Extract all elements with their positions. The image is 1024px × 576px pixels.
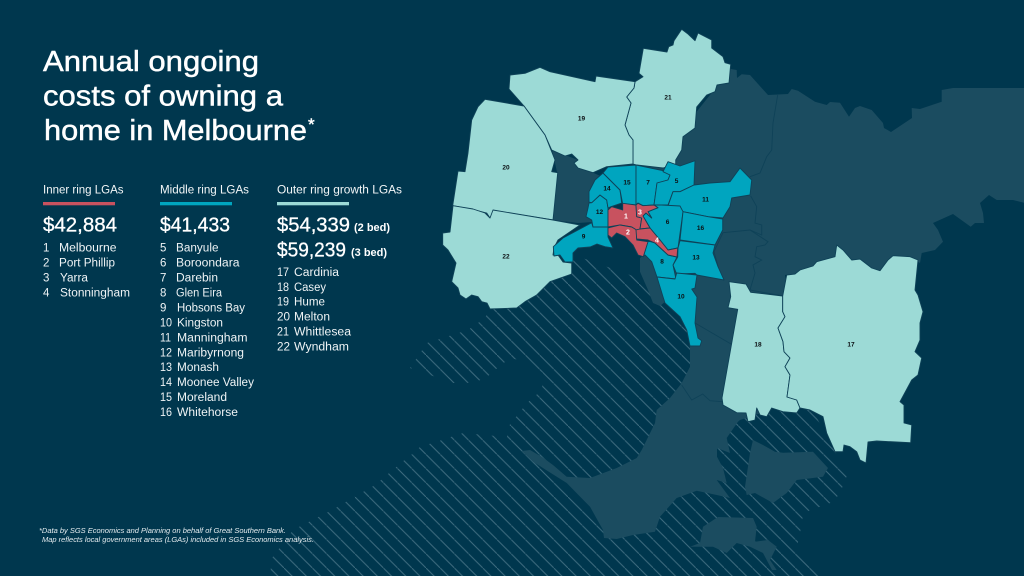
column: middle ring bbox=[160, 184, 254, 419]
column: inner ring: Inner ring LGAs bbox=[43, 184, 124, 196]
column: middle ring: Kingston bbox=[177, 317, 223, 329]
column: middle ring: Moonee Valley bbox=[177, 377, 254, 389]
map number labels: 22 bbox=[502, 254, 510, 260]
column: middle ring: 12 bbox=[160, 347, 172, 359]
column: outer ring: 21 bbox=[277, 326, 289, 338]
column: middle ring: Maribyrnong bbox=[177, 347, 244, 359]
title: costs of owning a bbox=[43, 80, 283, 112]
column: inner ring: Port Phillip bbox=[59, 258, 115, 270]
map number labels: 6 bbox=[666, 219, 670, 226]
column: middle ring: Banyule bbox=[176, 242, 218, 254]
column: inner ring: $42,884 bbox=[43, 214, 117, 237]
map number labels: 14 bbox=[603, 186, 611, 192]
map number labels: 19 bbox=[578, 116, 585, 122]
borders of surrounding LGAs bbox=[682, 95, 783, 402]
column: outer ring: Melton bbox=[294, 312, 330, 324]
column: outer ring: $54,339 bbox=[277, 214, 350, 237]
hatched water area bbox=[270, 250, 848, 576]
region 14 Moonee Valley bbox=[589, 173, 622, 208]
column: outer ring: Whittlesea bbox=[294, 326, 352, 338]
map number labels: 16 bbox=[697, 225, 704, 232]
column: outer ring bbox=[277, 184, 402, 354]
map number labels: 2 bbox=[626, 230, 630, 236]
footnote: Map reflects local government areas (LGAs) included in SGS Economics analysis. bbox=[42, 535, 314, 544]
column: outer ring: 19 bbox=[277, 297, 289, 309]
column: middle ring: Hobsons Bay bbox=[177, 302, 245, 314]
inner ring LGAs bbox=[608, 203, 678, 257]
column: inner ring: 3 bbox=[43, 272, 49, 284]
column: outer ring: (3 bed) bbox=[351, 247, 387, 259]
column: middle ring: Whitehorse bbox=[177, 407, 238, 419]
region 18 Casey bbox=[722, 282, 800, 422]
column: inner ring: 2 bbox=[43, 258, 49, 270]
column: outer ring: Outer ring growth LGAs bbox=[277, 184, 402, 196]
column: middle ring: Middle ring LGAs bbox=[160, 184, 249, 196]
region 22 Wyndham bbox=[443, 206, 580, 309]
region 19 Hume bbox=[509, 67, 635, 173]
footnote: *Data by SGS Economics and Planning on behalf of Great Southern Bank. bbox=[39, 526, 286, 535]
map number labels: 10 bbox=[677, 294, 685, 300]
region 11 Manningham bbox=[668, 168, 752, 218]
column: middle ring: 6 bbox=[160, 258, 166, 270]
column: outer ring: 22 bbox=[277, 342, 290, 354]
column: middle ring: 8 bbox=[160, 288, 166, 300]
column: inner ring bbox=[43, 184, 130, 300]
map number labels: 4 bbox=[655, 238, 659, 244]
region 13 Monash bbox=[673, 241, 724, 280]
region 20 Melton bbox=[453, 99, 558, 220]
map number labels: 1 bbox=[624, 214, 628, 220]
title: Annual ongoing bbox=[43, 46, 259, 78]
column: middle ring: Darebin bbox=[176, 272, 218, 284]
map number labels: 11 bbox=[702, 196, 709, 204]
title: home in Melbourne bbox=[44, 115, 307, 147]
map number labels: 12 bbox=[596, 209, 603, 216]
region 17 Cardinia bbox=[778, 245, 923, 463]
column: middle ring: 13 bbox=[160, 362, 172, 374]
region 16 Whitehorse bbox=[680, 212, 723, 245]
column: middle ring: 15 bbox=[160, 392, 172, 404]
column: middle ring: Moreland bbox=[177, 392, 227, 404]
surrounding land bbox=[522, 69, 1024, 570]
column: outer ring: 20 bbox=[277, 312, 290, 324]
map number labels: 9 bbox=[582, 234, 586, 240]
region 12 Maribyrnong bbox=[586, 195, 608, 227]
column: middle ring: 16 bbox=[160, 407, 172, 419]
column: middle ring: 14 bbox=[160, 377, 173, 389]
map number labels: 21 bbox=[664, 94, 672, 102]
map number labels: 3 bbox=[638, 210, 642, 216]
column: outer ring: 18 bbox=[277, 282, 289, 294]
map number labels: 15 bbox=[623, 180, 631, 186]
column: middle ring: Manningham bbox=[177, 332, 248, 344]
column: outer ring: Hume bbox=[294, 297, 325, 309]
map number labels: 20 bbox=[502, 164, 510, 172]
column: middle ring: Monash bbox=[177, 362, 219, 374]
column: outer ring: Cardinia bbox=[294, 267, 340, 279]
column: outer ring: $59,239 bbox=[277, 239, 346, 262]
column: middle ring: 11 bbox=[160, 332, 171, 344]
column: middle ring: Boroondara bbox=[176, 258, 240, 270]
map number labels: 8 bbox=[660, 258, 664, 266]
footnote bbox=[39, 526, 314, 544]
column: inner ring: Melbourne bbox=[59, 242, 116, 254]
column: inner ring: 1 bbox=[43, 242, 49, 254]
map number labels: 7 bbox=[646, 180, 650, 186]
region 21 Whittlesea bbox=[625, 29, 731, 168]
region 6 Boroondara bbox=[643, 205, 683, 250]
region 4 Stonnington bbox=[636, 228, 678, 257]
column: inner ring: Stonningham bbox=[60, 288, 130, 300]
column: middle ring: 7 bbox=[160, 272, 166, 284]
map number labels: 17 bbox=[847, 342, 855, 348]
region 2 Port Phillip bbox=[608, 225, 648, 257]
column: inner ring: 4 bbox=[43, 288, 50, 300]
map of Melbourne LGAs bbox=[270, 29, 1024, 576]
map number labels: 18 bbox=[754, 342, 762, 348]
region 9 Hobsons Bay bbox=[553, 223, 613, 262]
column: outer ring: 17 bbox=[277, 267, 289, 279]
column: inner ring: Yarra bbox=[60, 272, 89, 284]
map number labels: 5 bbox=[675, 178, 679, 185]
title: * bbox=[308, 115, 315, 134]
region 3 Yarra bbox=[636, 203, 658, 229]
map number labels: 13 bbox=[692, 254, 700, 262]
column: middle ring: 5 bbox=[160, 242, 166, 254]
column: middle ring: 9 bbox=[160, 302, 166, 314]
outer ring LGAs bbox=[443, 29, 923, 463]
middle ring LGAs bbox=[553, 161, 752, 346]
column: middle ring: $41,433 bbox=[160, 214, 230, 237]
map number labels bbox=[502, 94, 855, 348]
column: middle ring: 10 bbox=[160, 317, 172, 329]
region 7 Darebin bbox=[636, 165, 670, 206]
region 15 Moreland bbox=[603, 165, 636, 205]
region 5 Banyule bbox=[654, 161, 695, 205]
region 1 Melbourne bbox=[608, 203, 642, 230]
column: middle ring: Glen Eira bbox=[176, 288, 223, 300]
column: outer ring: (2 bed) bbox=[354, 222, 390, 234]
column: outer ring: Casey bbox=[294, 282, 326, 294]
column: outer ring: Wyndham bbox=[294, 342, 349, 354]
region 10 Kingston bbox=[657, 273, 702, 346]
region 8 Glen Eira bbox=[643, 241, 677, 279]
title bbox=[43, 46, 315, 147]
